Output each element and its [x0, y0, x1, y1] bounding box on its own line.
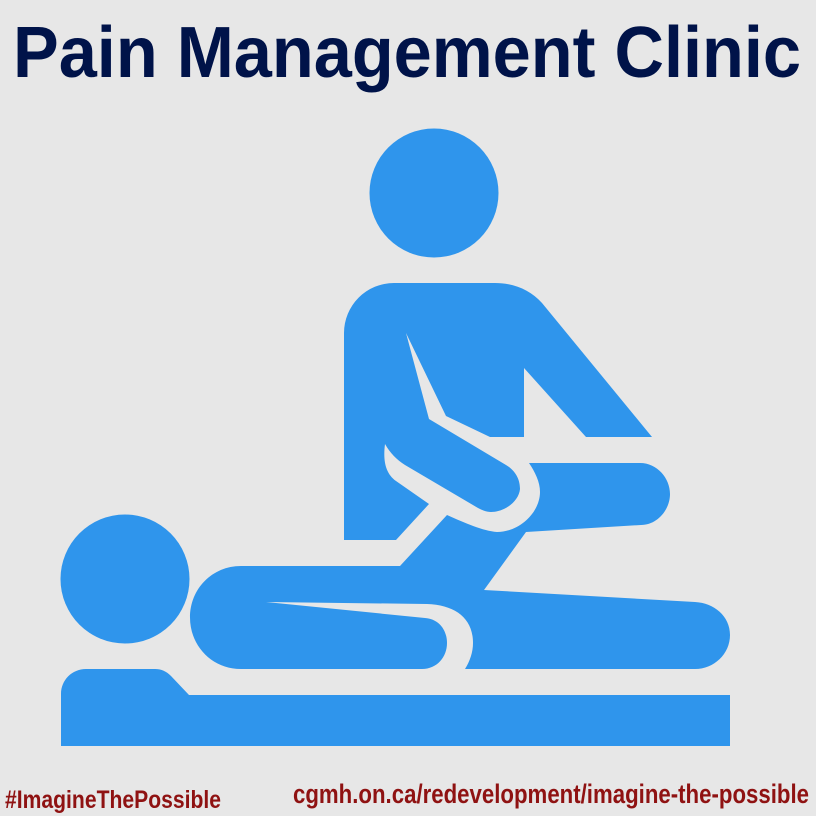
icon: therapist body and arm: [344, 283, 652, 540]
icon: patient body and raised leg: [190, 463, 730, 669]
icon: patient head: [60, 514, 190, 644]
icon: treatment bed: [61, 669, 730, 746]
icon: physiotherapist treating a patient on a bed: [60, 128, 730, 746]
icon: therapist head: [370, 128, 498, 258]
hashtag: #ImagineThePossible: [5, 786, 221, 814]
